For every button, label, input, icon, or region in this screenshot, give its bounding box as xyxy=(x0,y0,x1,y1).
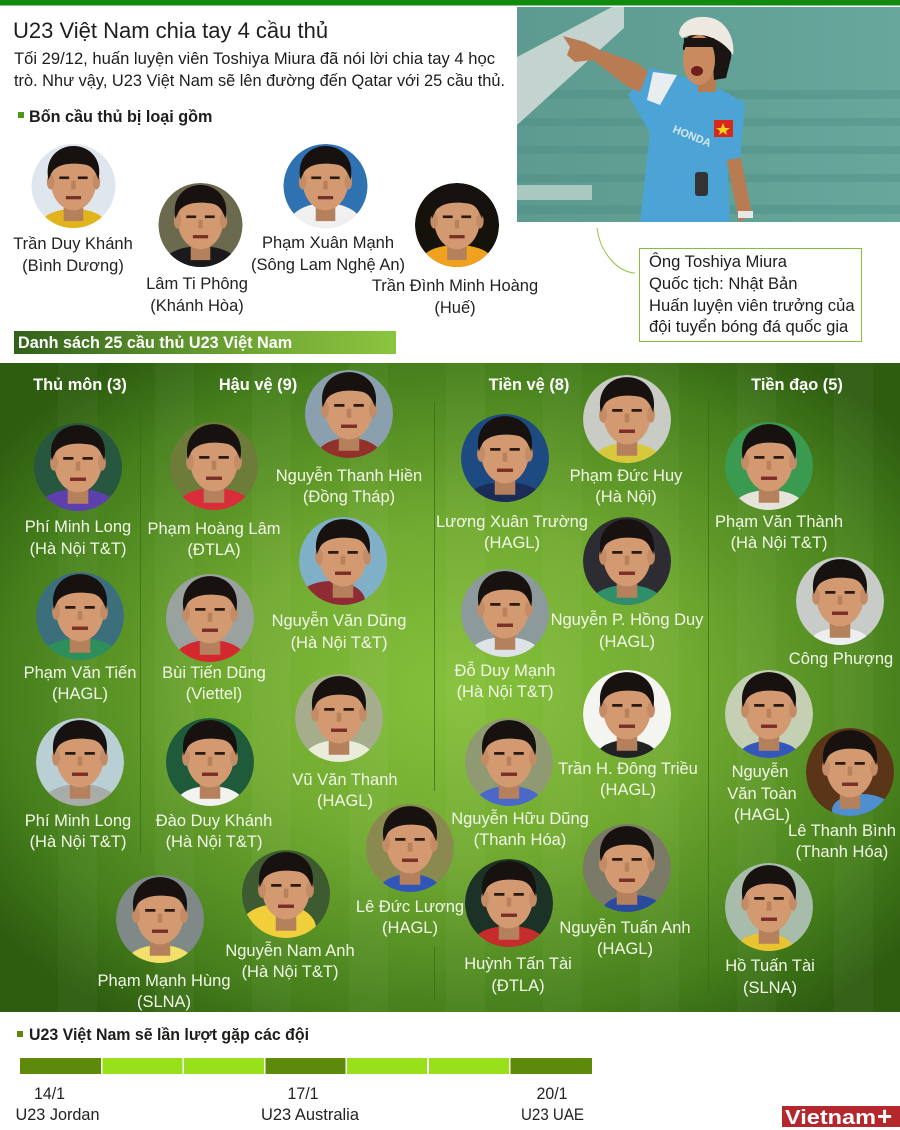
midfielder: Nguyễn Tuấn Anh: (HAGL) xyxy=(597,940,653,958)
midfielder: Đỗ Duy Mạnh xyxy=(455,569,555,701)
fixture: Australia xyxy=(261,1085,360,1124)
goalkeeper: Phí Minh Long: Phí Minh Long xyxy=(25,518,131,536)
defender: Đào Duy Khánh: Đào Duy Khánh xyxy=(156,812,272,830)
midfielder: Huỳnh Tấn Tài: (ĐTLA) xyxy=(491,977,545,995)
callout curve xyxy=(597,228,635,273)
midfielder: Nguyễn P. Hồng Duy: Nguyễn P. Hồng Duy xyxy=(551,610,704,629)
coach photo xyxy=(517,7,900,222)
column heading: Tiền vệ: Tiền vệ (8) xyxy=(489,376,569,394)
dropped player: Trần Duy Khánh: (Bình Dương) xyxy=(22,257,124,275)
midfielder: Huỳnh Tấn Tài: Huỳnh Tấn Tài xyxy=(464,955,572,973)
defender: Phạm Mạnh Hùng xyxy=(98,875,230,1011)
heading: dropped players: Bốn cầu thủ bị loại gồm xyxy=(29,108,212,126)
forward: Hồ Tuấn Tài: Hồ Tuấn Tài xyxy=(725,957,815,975)
fixture: Jordan: U23 Jordan xyxy=(16,1106,100,1124)
fixture: Australia: U23 Australia xyxy=(261,1106,360,1124)
defender: Nguyễn Nam Anh: (Hà Nội T&T) xyxy=(242,963,338,981)
midfielder: Phạm Đức Huy: (Hà Nội) xyxy=(595,488,657,506)
panel: football field squad xyxy=(0,363,900,1012)
defender: Nguyễn Văn Dũng: (Hà Nội T&T) xyxy=(291,634,387,652)
forward: Công Phượng: Công Phượng xyxy=(789,650,893,668)
midfielder: Nguyễn Hữu Dũng: Nguyễn Hữu Dũng xyxy=(451,809,589,828)
midfielder: Đỗ Duy Mạnh: Đỗ Duy Mạnh xyxy=(455,661,555,680)
coach callout: đội tuyển bóng đá quốc gia xyxy=(649,317,849,336)
defender: Lê Đức Lương: (HAGL) xyxy=(382,919,438,937)
forward: Nguyễn Văn Toàn xyxy=(725,670,813,824)
intro text xyxy=(14,49,505,90)
column heading: Tiền đạo: Tiền đạo (5) xyxy=(751,376,843,394)
forward: Lê Thanh Bình xyxy=(788,728,896,861)
defender: Nguyễn Thanh Hiền: Nguyễn Thanh Hiền xyxy=(276,466,422,485)
goalkeeper: Phí Minh Long 2: (Hà Nội T&T) xyxy=(30,833,126,851)
goalkeeper: Phí Minh Long: (Hà Nội T&T) xyxy=(30,540,126,558)
timeline bar xyxy=(20,1058,592,1074)
intro text: Tối 29/12, huấn luyện viên Toshiya Miura đã nói lời chia tay 4 học xyxy=(14,49,495,68)
midfielder: Huỳnh Tấn Tài xyxy=(464,859,572,995)
dropped player: Trần Đình Minh Hoàng xyxy=(372,183,538,317)
defender: Vũ Văn Thanh: Vũ Văn Thanh xyxy=(292,771,398,789)
fixture: UAE: 20/1 xyxy=(536,1085,568,1103)
goalkeeper: Phạm Văn Tiến: (HAGL) xyxy=(52,685,108,703)
intro text: trò. Như vậy, U23 Việt Nam sẽ lên đường đến Qatar với 25 cầu thủ. xyxy=(14,71,505,90)
forward: Công Phượng xyxy=(789,557,893,668)
defender: Nguyễn Thanh Hiền xyxy=(276,370,422,506)
midfielder: Trần H. Đông Triều xyxy=(558,670,698,799)
defender: Nguyễn Nam Anh: Nguyễn Nam Anh xyxy=(225,941,355,960)
dropped player: Phạm Xuân Mạnh: Phạm Xuân Mạnh xyxy=(262,234,394,252)
forward: Hồ Tuấn Tài xyxy=(725,863,815,997)
midfielder: Nguyễn Hữu Dũng xyxy=(451,718,589,849)
forward: Phạm Văn Thành xyxy=(715,422,843,552)
coach callout xyxy=(640,248,862,342)
defender: Phạm Hoàng Lâm: (ĐTLA) xyxy=(187,541,241,559)
goalkeeper: Phí Minh Long xyxy=(25,423,131,558)
defender: Phạm Mạnh Hùng: (SLNA) xyxy=(137,993,191,1011)
midfielder: Lương Xuân Trường: (HAGL) xyxy=(484,534,540,552)
column heading: Hậu vệ: Hậu vệ (9) xyxy=(219,376,297,394)
midfielder: Nguyễn P. Hồng Duy: (HAGL) xyxy=(599,633,655,651)
forward: Hồ Tuấn Tài: (SLNA) xyxy=(743,979,797,997)
defender: Vũ Văn Thanh xyxy=(292,674,398,810)
list banner xyxy=(14,331,396,354)
defender: Phạm Hoàng Lâm xyxy=(148,422,280,559)
defender: Vũ Văn Thanh: (HAGL) xyxy=(317,792,373,810)
list banner: Danh sách 25 cầu thủ U23 Việt Nam xyxy=(18,334,292,352)
midfielder: Phạm Đức Huy xyxy=(570,375,683,506)
goalkeeper: Phạm Văn Tiến xyxy=(24,572,136,703)
forward: Nguyễn Văn Toàn: Nguyễn xyxy=(732,762,788,781)
coach callout: Quốc tịch: Nhật Bản xyxy=(649,274,798,293)
forward: Nguyễn Văn Toàn: (HAGL) xyxy=(734,806,790,824)
coach callout: Ông Toshiya Miura xyxy=(649,252,788,271)
midfielder: Phạm Đức Huy: Phạm Đức Huy xyxy=(570,467,683,485)
midfielder: Đỗ Duy Mạnh: (Hà Nội T&T) xyxy=(457,683,553,701)
defender: Phạm Mạnh Hùng: Phạm Mạnh Hùng xyxy=(98,972,230,990)
coach callout: Huấn luyện viên trưởng của xyxy=(649,296,855,315)
midfielder: Nguyễn Tuấn Anh: Nguyễn Tuấn Anh xyxy=(559,918,691,937)
dropped player: Lâm Ti Phông xyxy=(146,183,248,315)
dropped player: Trần Đình Minh Hoàng: (Huế) xyxy=(434,299,476,317)
midfielder: Lương Xuân Trường: Lương Xuân Trường xyxy=(436,513,588,531)
defender: Đào Duy Khánh: (Hà Nội T&T) xyxy=(166,833,262,851)
defender: Lê Đức Lương xyxy=(356,804,464,937)
goalkeeper: Phí Minh Long 2 xyxy=(25,718,131,851)
forward: Nguyễn Văn Toàn: Văn Toàn xyxy=(727,785,797,803)
dropped player: Trần Duy Khánh: Trần Duy Khánh xyxy=(13,235,133,253)
fixture: Jordan: 14/1 xyxy=(34,1085,65,1103)
midfielder: Nguyễn Hữu Dũng: (Thanh Hóa) xyxy=(474,831,566,849)
defender: Bùi Tiến Dũng: Bùi Tiến Dũng xyxy=(162,664,266,682)
title: U23 Việt Nam chia tay 4 cầu thủ xyxy=(13,18,328,43)
dropped player: Phạm Xuân Mạnh: (Sông Lam Nghệ An) xyxy=(251,256,405,274)
goalkeeper: Phí Minh Long 2: Phí Minh Long xyxy=(25,812,131,830)
defender: Bùi Tiến Dũng: (Viettel) xyxy=(186,685,242,703)
midfielder: Nguyễn Tuấn Anh xyxy=(559,824,691,958)
dropped player: Trần Đình Minh Hoàng: Trần Đình Minh Hoàng xyxy=(372,277,538,295)
heading: group fixtures: U23 Việt Nam sẽ lần lượt gặp các đội xyxy=(29,1025,309,1044)
dropped player: Lâm Ti Phông: Lâm Ti Phông xyxy=(146,275,248,293)
defender: Bùi Tiến Dũng xyxy=(162,574,266,703)
goalkeeper: Phạm Văn Tiến: Phạm Văn Tiến xyxy=(24,664,136,682)
dropped player: Trần Duy Khánh xyxy=(13,144,133,275)
defender: Nguyễn Văn Dũng xyxy=(272,517,406,652)
fixture: Australia: 17/1 xyxy=(288,1085,318,1103)
fixture: UAE xyxy=(521,1085,584,1124)
midfielder: Trần H. Đông Triều: Trần H. Đông Triều xyxy=(558,760,698,778)
defender: Lê Đức Lương: Lê Đức Lương xyxy=(356,898,464,916)
dropped player: Lâm Ti Phông: (Khánh Hòa) xyxy=(150,297,244,315)
defender: Nguyễn Thanh Hiền: (Đồng Tháp) xyxy=(303,488,395,506)
defender: Phạm Hoàng Lâm: Phạm Hoàng Lâm xyxy=(148,520,280,538)
defender: Nguyễn Nam Anh xyxy=(225,850,355,981)
forward: Phạm Văn Thành: Phạm Văn Thành xyxy=(715,513,843,531)
fixture: Jordan xyxy=(16,1085,100,1124)
midfielder: Nguyễn P. Hồng Duy xyxy=(551,517,704,651)
coach photo: HONDA xyxy=(671,124,713,150)
logo: Vietnam+: Vietnam xyxy=(785,1107,876,1129)
logo: Vietnam+ xyxy=(782,1101,900,1130)
defender: Đào Duy Khánh xyxy=(156,718,272,851)
midfielder: Trần H. Đông Triều: (HAGL) xyxy=(600,781,656,799)
column heading: Thủ môn: Thủ môn (3) xyxy=(33,376,127,394)
dropped player: Phạm Xuân Mạnh xyxy=(251,144,405,274)
forward: Lê Thanh Bình: Lê Thanh Bình xyxy=(788,822,896,840)
forward: Lê Thanh Bình: (Thanh Hóa) xyxy=(796,843,888,861)
defender: Nguyễn Văn Dũng: Nguyễn Văn Dũng xyxy=(272,611,406,630)
fixture: UAE: U23 UAE xyxy=(521,1106,584,1124)
forward: Phạm Văn Thành: (Hà Nội T&T) xyxy=(731,534,827,552)
midfielder: Lương Xuân Trường xyxy=(436,414,588,552)
top bar xyxy=(0,0,900,6)
